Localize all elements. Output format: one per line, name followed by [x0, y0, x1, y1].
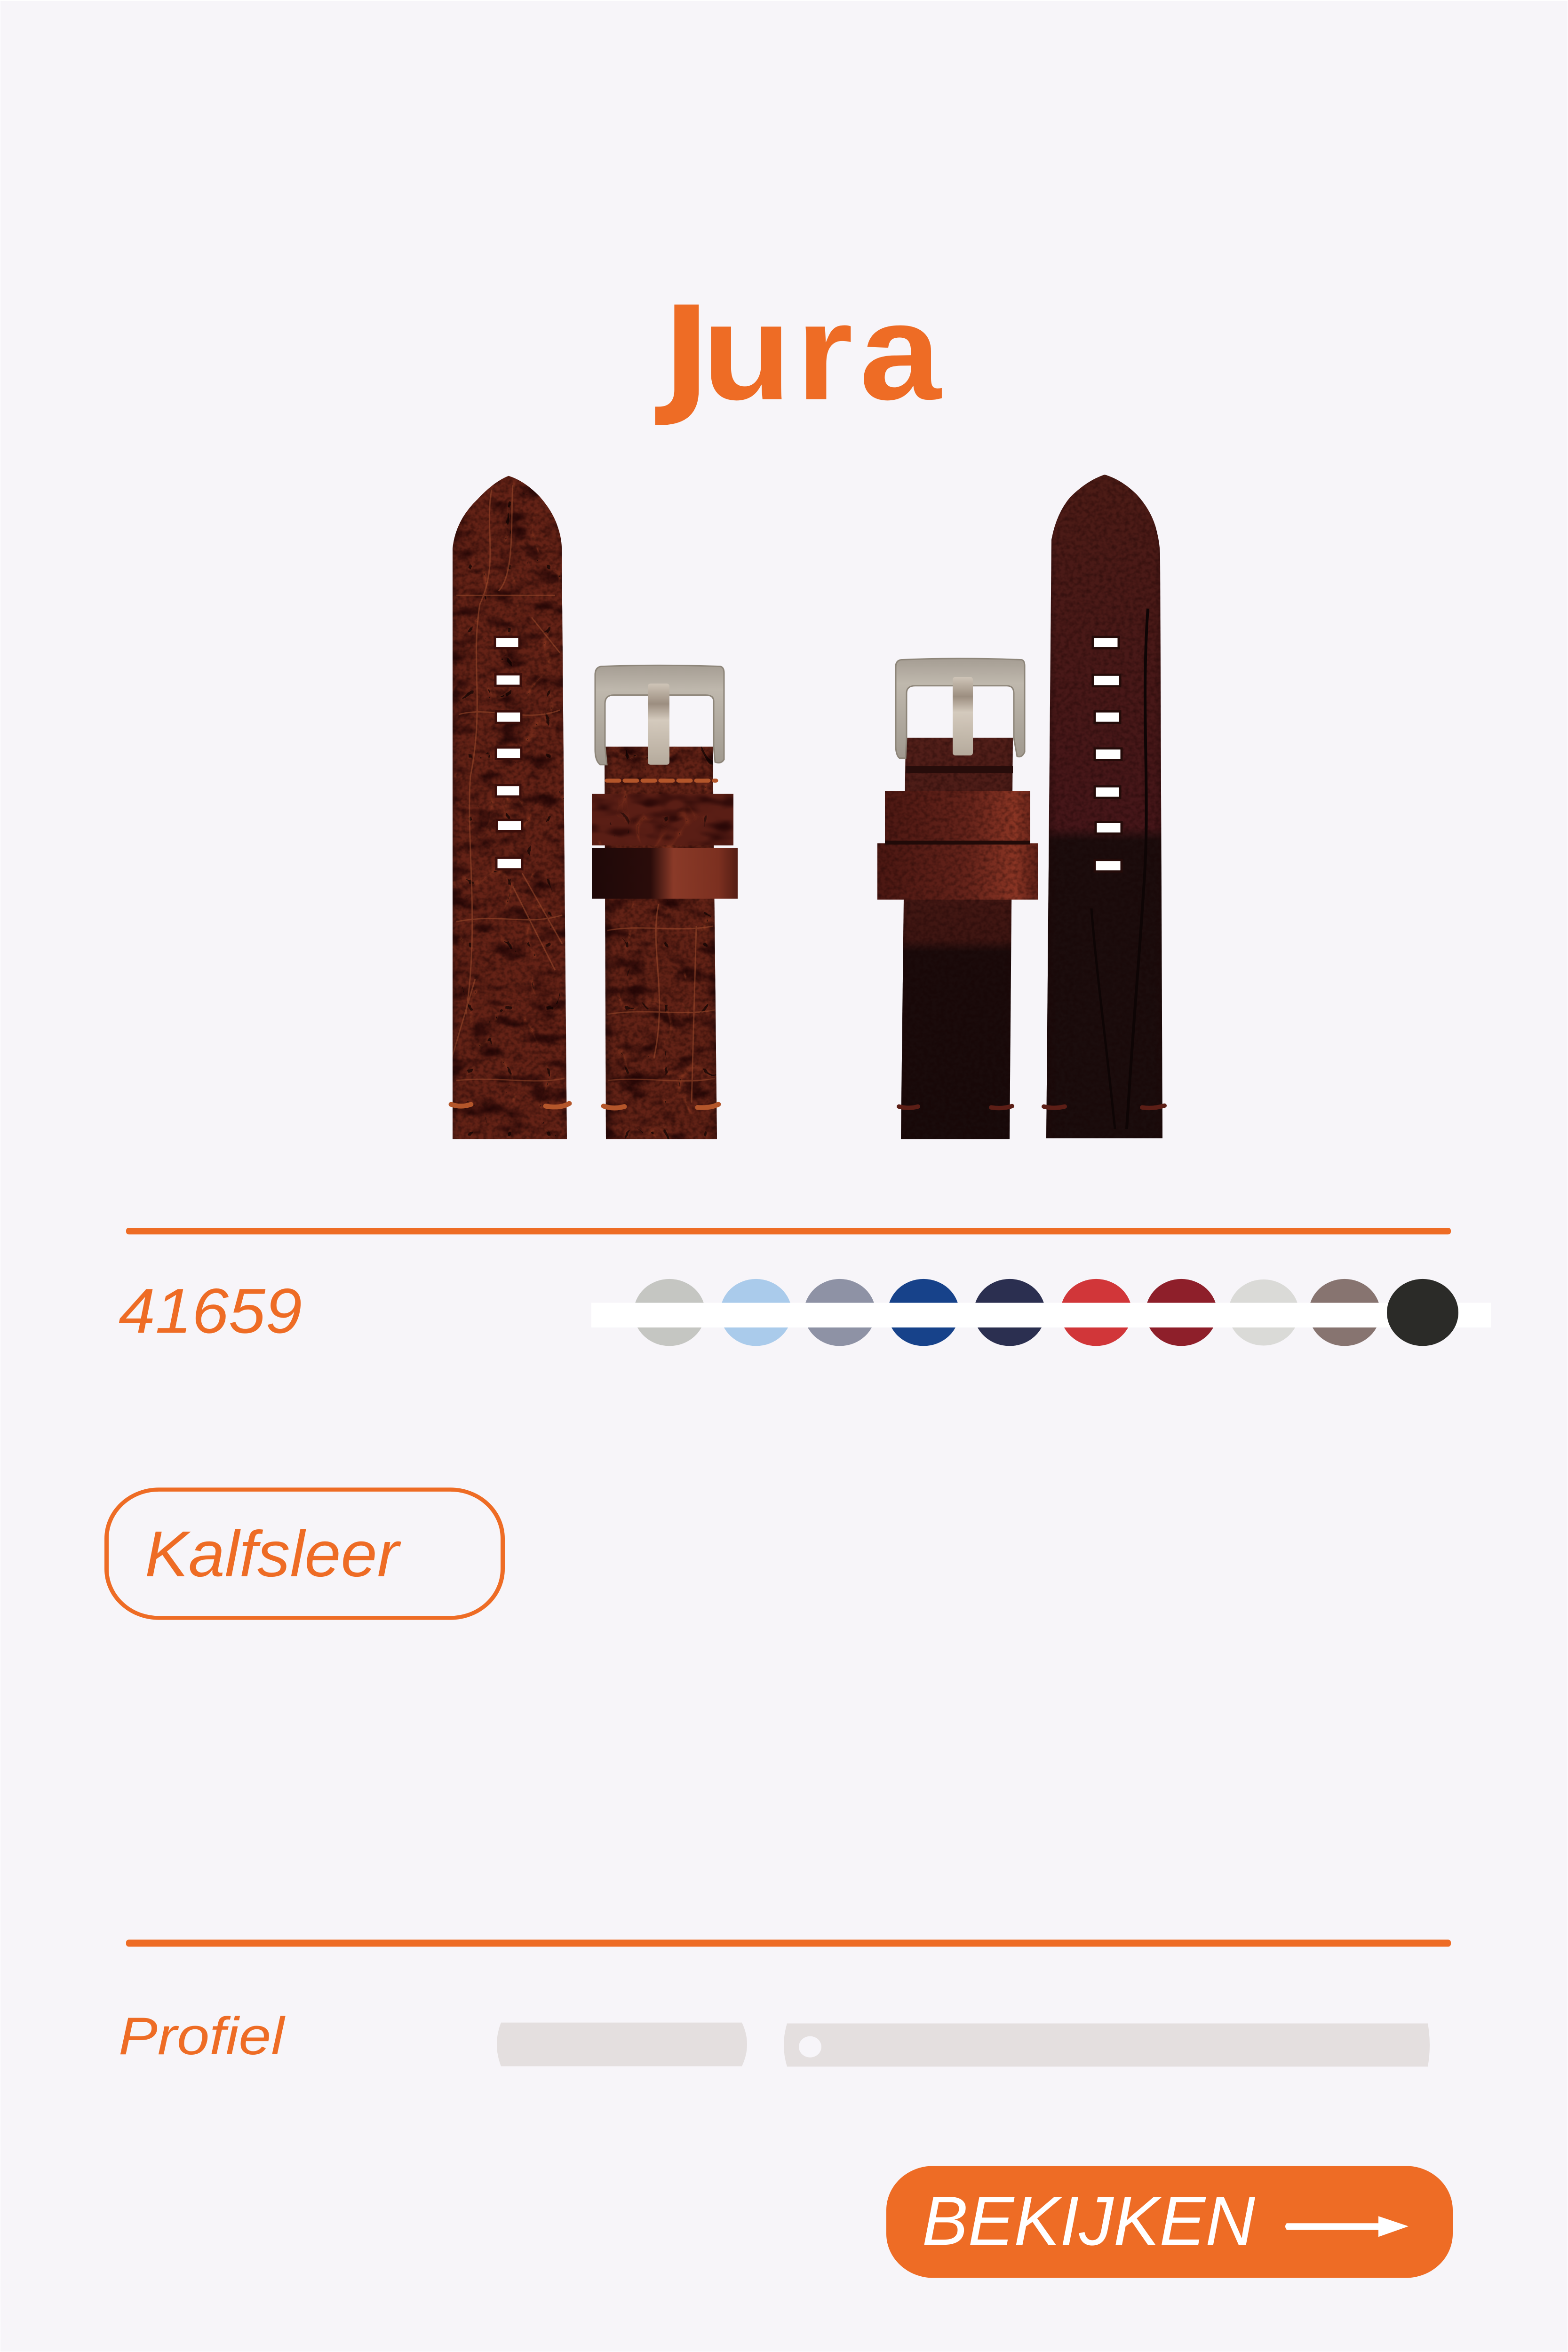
strap: red-brown long piece	[447, 472, 574, 1142]
buckle	[595, 665, 724, 765]
buckle	[896, 659, 1025, 758]
profile bar: short piece	[497, 2023, 747, 2066]
material tag: Kalfsleer: Kalfsleer	[145, 1518, 401, 1590]
button: bekijken	[886, 2166, 1453, 2278]
divider: lower	[126, 1939, 1451, 1947]
buckle tongue	[953, 677, 973, 755]
profile bar: long piece	[784, 2024, 1430, 2066]
title: J	[654, 279, 711, 430]
strap: red-brown buckle piece	[590, 665, 741, 1142]
button: bekijken: BEKIJKEN	[922, 2182, 1255, 2260]
stitching	[607, 779, 716, 783]
product image: watch straps	[447, 472, 1167, 1142]
article number: 41659	[119, 1275, 302, 1346]
title: ura	[702, 275, 942, 428]
buckle tongue	[648, 683, 669, 765]
colour swatches	[591, 1279, 1491, 1346]
loops	[590, 794, 741, 900]
strap: dark buckle piece	[875, 659, 1040, 1142]
divider: upper	[126, 1228, 1451, 1234]
strap: dark long piece	[1044, 472, 1167, 1142]
profile label: Profiel	[119, 2007, 286, 2066]
arrow	[1285, 2216, 1409, 2237]
loops	[875, 789, 1040, 902]
material tag: Kalfsleer	[106, 1490, 502, 1618]
